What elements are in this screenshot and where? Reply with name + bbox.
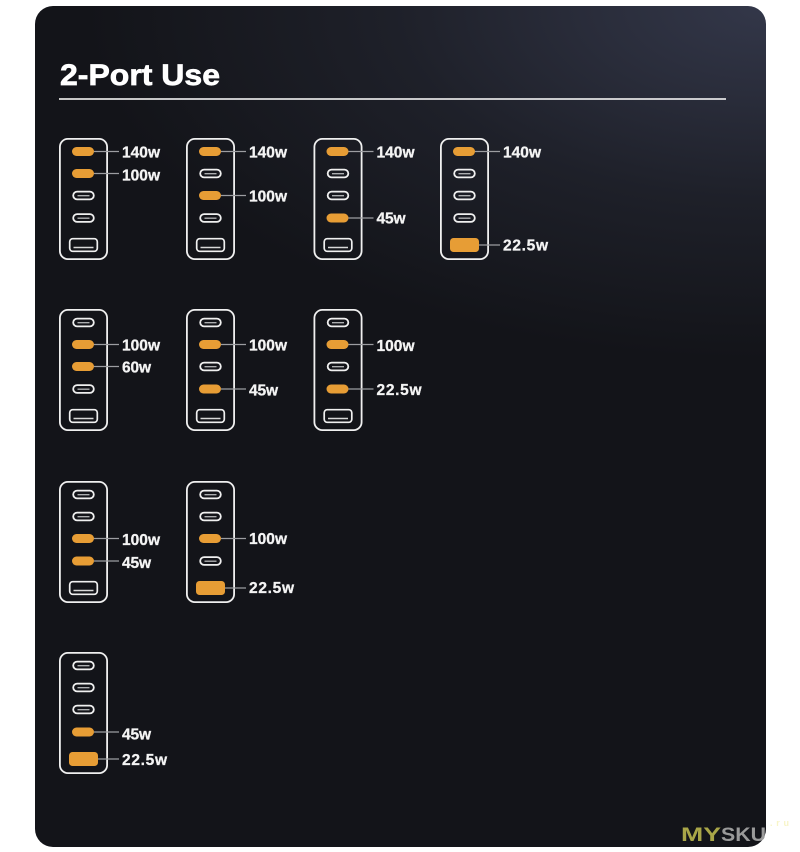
module: 140w + 45w: 45w [376, 210, 406, 228]
module: 100w + 45w (ports 2, 4) [187, 310, 288, 430]
module: 100w + 22.5w (ports 2, 4): 22.5w [376, 382, 422, 399]
module: 140w + 100w (ports 1, 2) [60, 139, 161, 259]
module: 140w + 100w (ports 1, 3): 100w [249, 188, 288, 206]
module: 140w + 100w (ports 1, 2): 140w [122, 144, 161, 162]
module: 100w + 45w (ports 3, 4) [60, 482, 161, 602]
module: 140w + 100w (ports 1, 2): 100w [122, 168, 161, 184]
watermark: MY [681, 825, 721, 846]
module: 100w + 22.5w (ports 3, USB-A): 100w [249, 531, 288, 548]
module: 100w + 60w: 60w [122, 360, 152, 376]
module: 100w + 45w (ports 3, 4): 45w [122, 555, 152, 572]
title: 2-Port Use [60, 59, 220, 92]
module: 45w + 22.5w [60, 653, 168, 773]
module: 140w + 22.5w [441, 139, 549, 259]
module: 140w + 45w: 140w [376, 144, 415, 162]
module: 100w + 60w [60, 310, 161, 430]
module: 45w + 22.5w: 45w [122, 726, 152, 744]
module: 140w + 100w (ports 1, 3): 140w [249, 144, 288, 162]
watermark: SKU [721, 825, 766, 846]
module: 100w + 22.5w (ports 3, USB-A): 22.5w [249, 580, 295, 597]
module: 140w + 22.5w: 140w [503, 144, 542, 162]
watermark [681, 818, 789, 846]
module: 140w + 45w [314, 139, 415, 259]
module: 100w + 22.5w (ports 3, USB-A) [187, 482, 295, 602]
module: 140w + 22.5w: 22.5w [503, 238, 549, 255]
watermark: .ru [770, 818, 789, 828]
module: 45w + 22.5w: 22.5w [122, 752, 168, 769]
module: 100w + 22.5w (ports 2, 4): 100w [376, 338, 415, 355]
module: 100w + 60w: 100w [122, 338, 161, 354]
module: 100w + 45w (ports 2, 4): 45w [249, 382, 279, 400]
module: 100w + 45w (ports 2, 4): 100w [249, 338, 288, 354]
title underline [59, 98, 726, 100]
module: 140w + 100w (ports 1, 3) [187, 139, 288, 259]
module: 100w + 22.5w (ports 2, 4) [314, 310, 422, 430]
module: 100w + 45w (ports 3, 4): 100w [122, 532, 161, 549]
